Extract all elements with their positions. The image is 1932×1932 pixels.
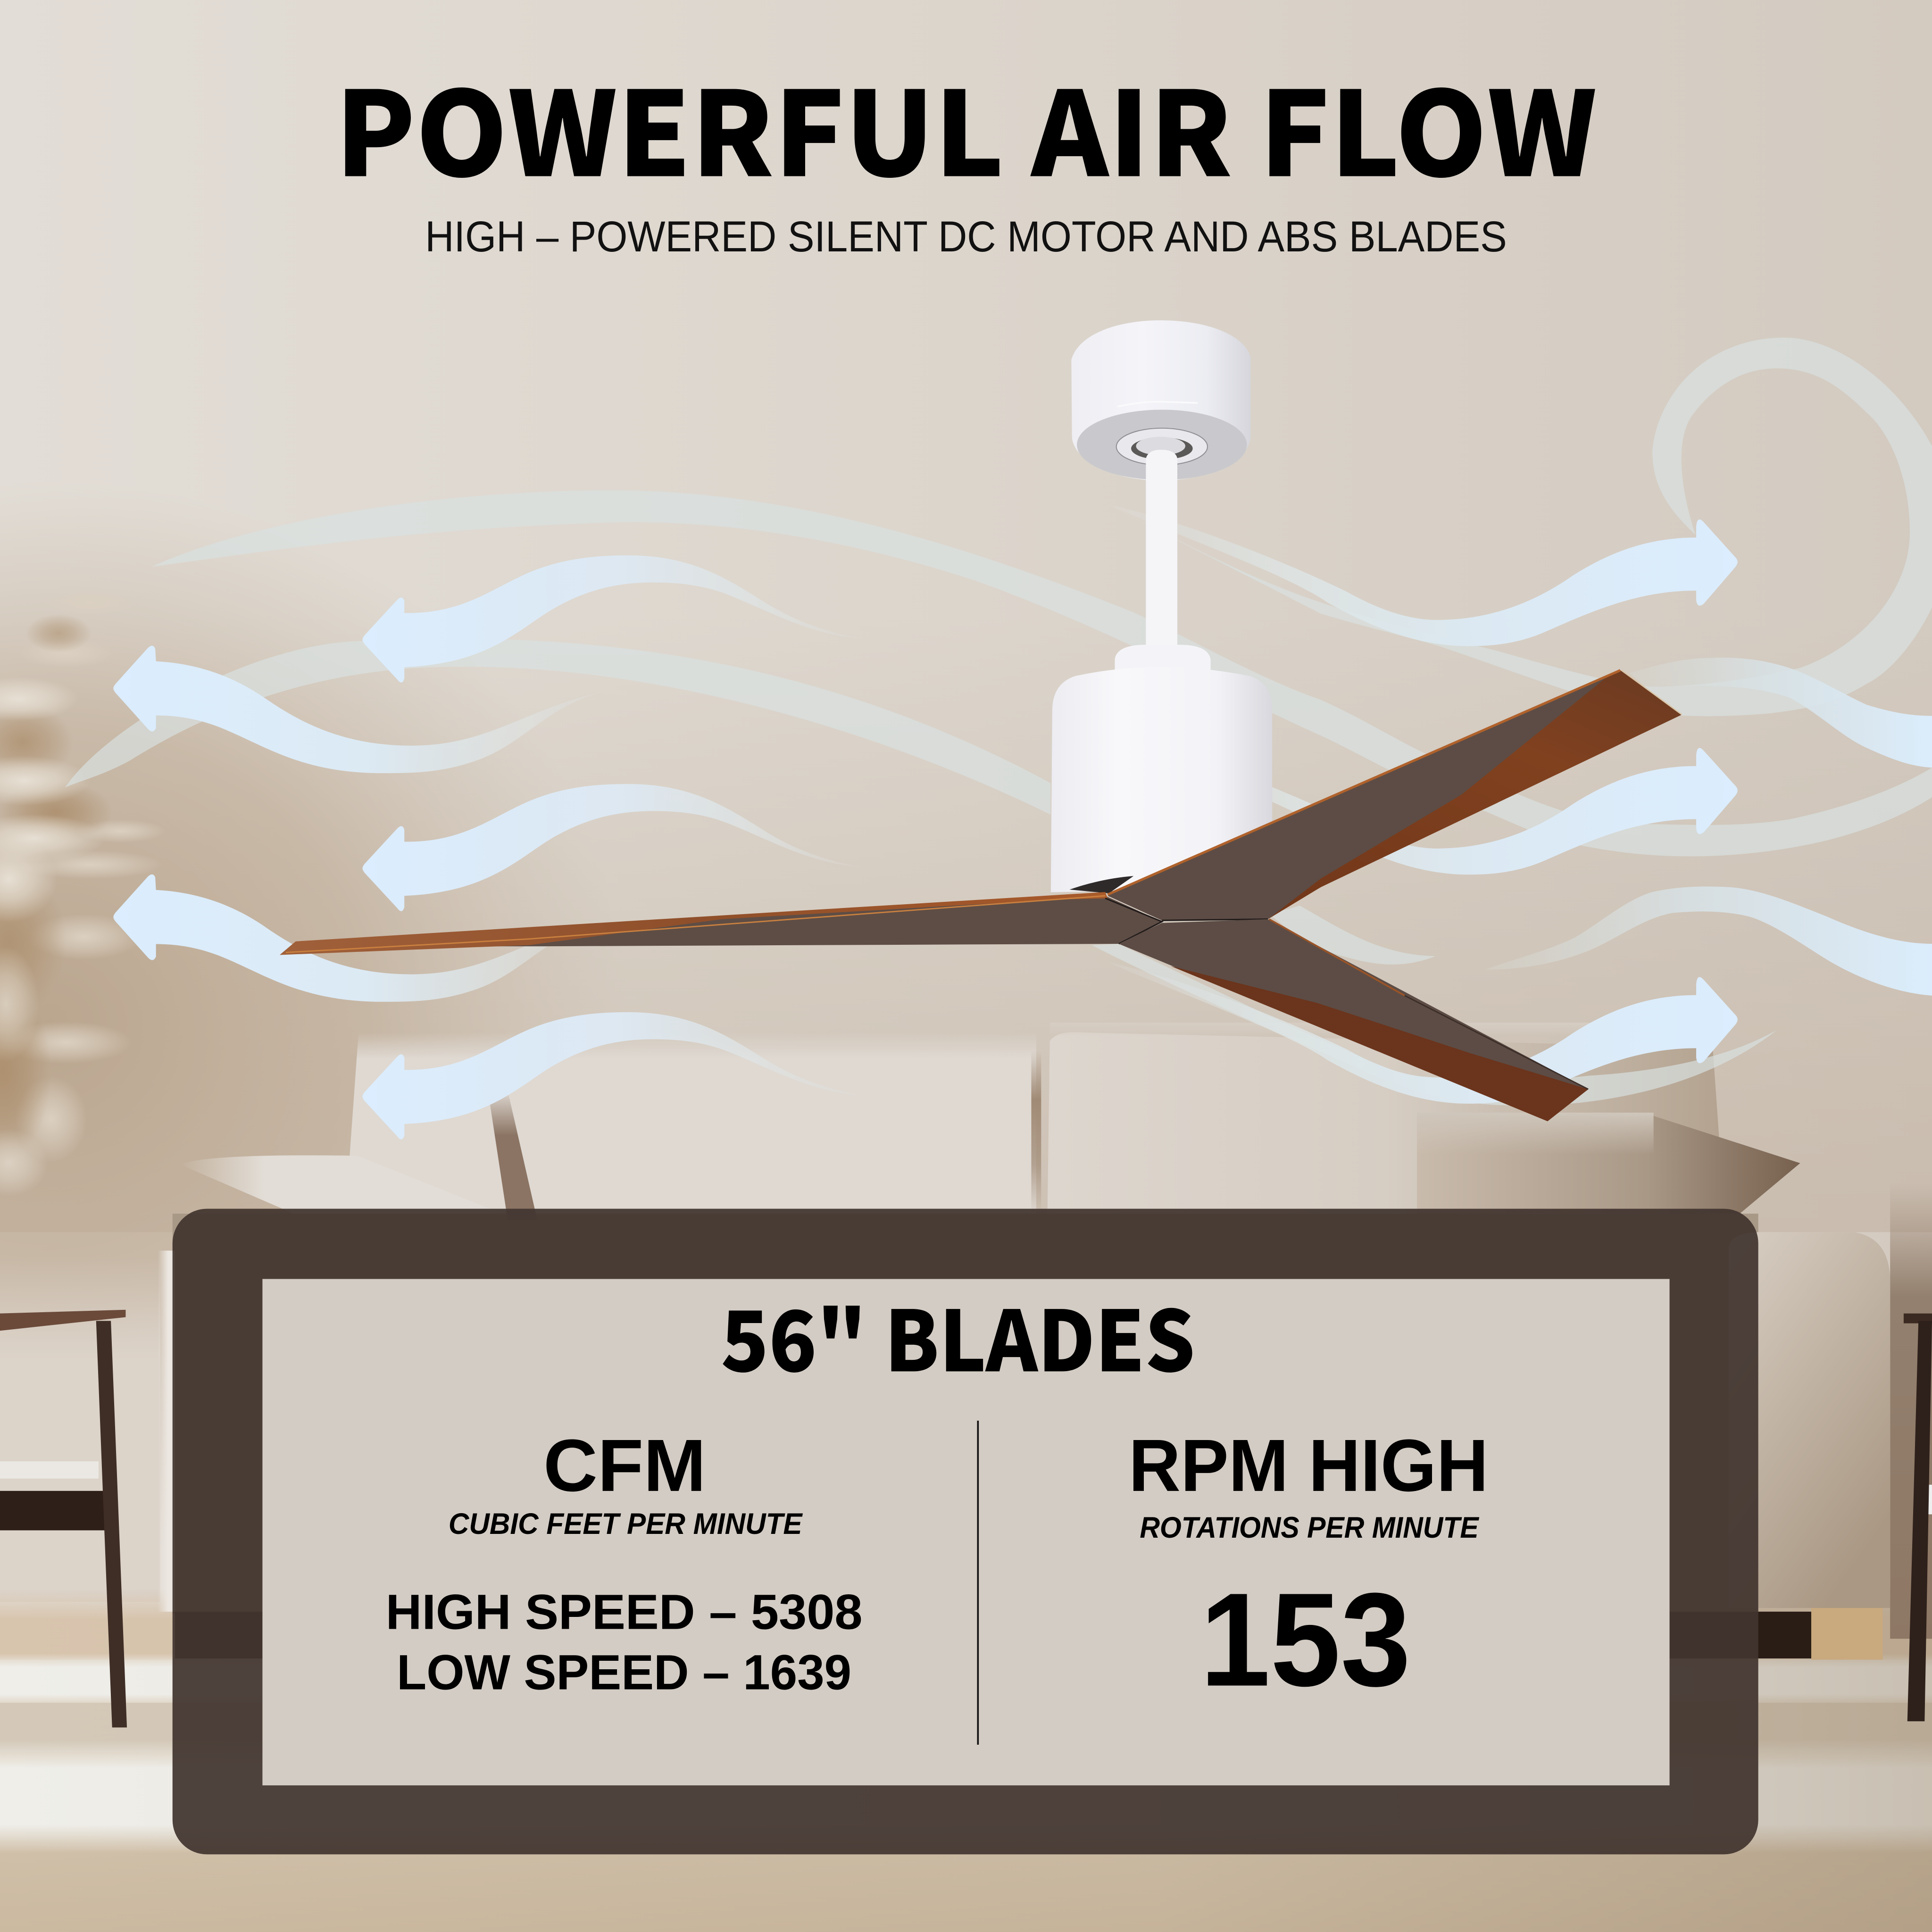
arrows pointing left [113, 555, 866, 1140]
rod collar [1115, 645, 1211, 670]
ribbon: second left [65, 639, 1050, 815]
arrow: bottom right [1106, 962, 1738, 1104]
blades heading: 56" BLADES [721, 1274, 1195, 1396]
RPM column: RPM HIGH [1129, 1424, 1489, 1507]
RPM column: ROTATIONS PER MINUTE [1140, 1511, 1480, 1544]
canopy [1071, 320, 1250, 481]
column divider [977, 1421, 979, 1745]
sofa cushions [180, 1023, 1800, 1226]
CFM column: HIGH SPEED – 5308 [386, 1584, 863, 1640]
arrow: upper left large [113, 646, 614, 773]
arrows pointing right [1106, 504, 1738, 1104]
down rod [1146, 450, 1177, 653]
ceiling fan [280, 320, 1682, 1121]
ribbon: loop at right [1107, 338, 1932, 716]
air flow ribbons [65, 338, 1932, 1106]
arrow: middle right [1106, 733, 1738, 874]
specs panel [173, 1209, 1758, 1854]
title: POWERFUL AIR FLOW [335, 41, 1597, 210]
ribbon: lower right [1091, 944, 1777, 1106]
inner card [262, 1279, 1670, 1785]
motor housing [1051, 667, 1272, 892]
CFM column: LOW SPEED – 1639 [397, 1645, 851, 1700]
subtitle: HIGH – POWERED SILENT DC MOTOR AND ABS BLADES [425, 213, 1507, 261]
ribbon: under blade [1269, 906, 1435, 965]
CFM column: CFM [543, 1424, 706, 1507]
upper right blade [1108, 670, 1682, 920]
motor underside [1069, 876, 1133, 893]
lower right blade [1119, 919, 1588, 1121]
arrow: middle small left [362, 784, 866, 911]
arrow: lower left large [113, 874, 614, 1002]
left blade [280, 892, 1162, 955]
motor and collar [1051, 645, 1272, 892]
arrow: bottom small left [362, 1012, 866, 1140]
RPM column [1129, 1424, 1489, 1714]
CFM column: CUBIC FEET PER MINUTE [449, 1507, 803, 1541]
ribbon: long upper [151, 491, 1932, 857]
left chair [0, 1310, 127, 1727]
right chair [1904, 1314, 1932, 1721]
arrow: top right [1106, 504, 1738, 646]
air waves leaving right edge [1485, 658, 1932, 996]
arrow: top small left [362, 555, 866, 683]
pampas grass [0, 591, 166, 1196]
sofa body [158, 1051, 1890, 1660]
CFM column [386, 1424, 863, 1700]
RPM column: 153 [1200, 1566, 1411, 1714]
